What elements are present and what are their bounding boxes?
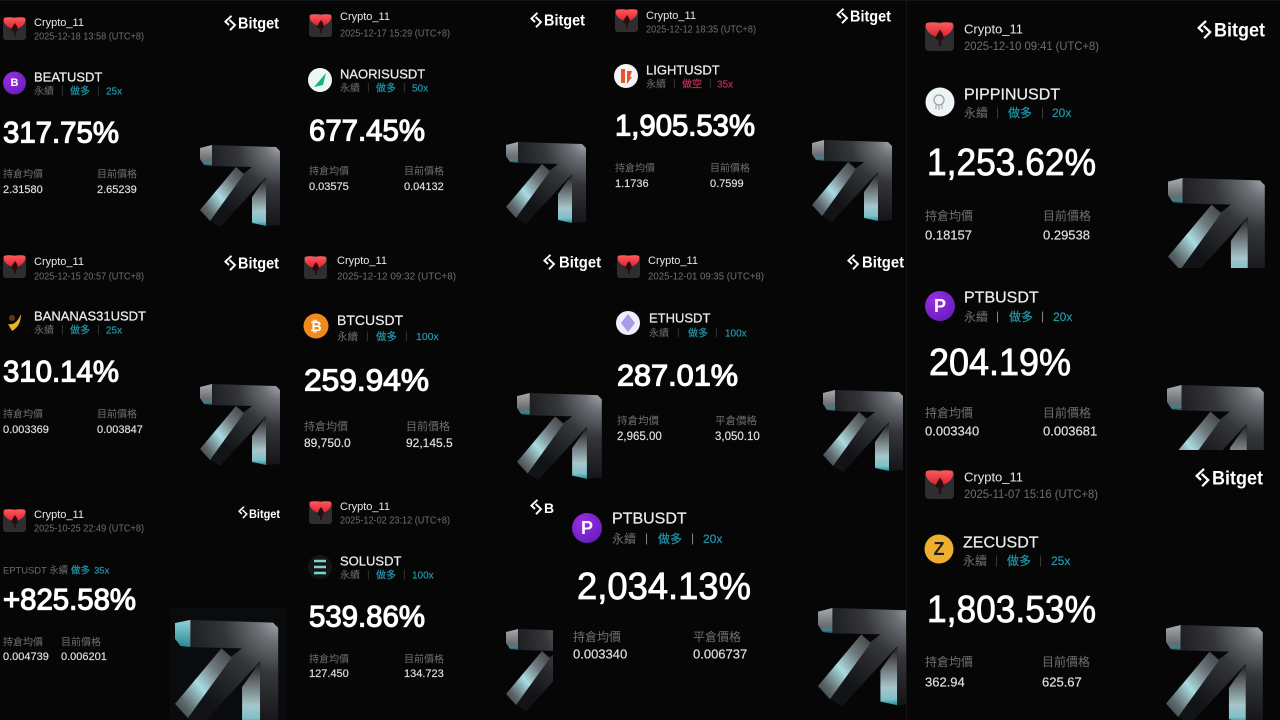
position details: | [709, 78, 712, 90]
arrow graphic [517, 393, 602, 480]
position details: 做多 [376, 568, 396, 582]
position details [3, 564, 110, 576]
username and timestamp [964, 470, 1098, 501]
avatar [3, 255, 26, 278]
panel: BANANAS31USDT card [3, 255, 280, 466]
position details: | [61, 86, 64, 96]
position details: | [996, 309, 999, 323]
avatar [3, 17, 26, 40]
entry price: 2,965.00 [617, 431, 662, 443]
current price [97, 168, 137, 196]
entry price [615, 162, 655, 190]
current price: 0.29538 [1043, 228, 1090, 242]
icon: LIGHT coin [614, 64, 638, 88]
position details: | [673, 78, 676, 90]
entry price [304, 419, 351, 450]
username and timestamp [648, 255, 764, 282]
Bitget logo, cropped: B [544, 500, 554, 516]
arrow graphic, cropped [506, 629, 553, 711]
position details: | [97, 324, 100, 336]
return percent: +825.58% [3, 584, 136, 616]
position details: | [405, 330, 408, 342]
panel: BEATUSDT card [3, 16, 280, 227]
icon: ZEC coin: Z [934, 539, 944, 559]
position details: 永續 [964, 309, 988, 324]
symbol: LIGHTUSDT [646, 62, 720, 78]
current price [404, 164, 444, 193]
entry price: 持倉均價 [573, 629, 621, 644]
username and timestamp: 2025-12-01 09:35 (UTC+8) [648, 272, 764, 282]
position details [963, 553, 1070, 568]
position details: | [367, 82, 370, 94]
Bitget logo: Bitget [238, 16, 280, 32]
position details [964, 105, 1071, 120]
panel: PTBUSDT card (right) [925, 291, 1264, 450]
current price: 0.006201 [61, 651, 107, 663]
position details: 做多 [658, 531, 682, 546]
entry price [3, 636, 49, 663]
current price: 目前價格 [404, 164, 444, 178]
position details: | [403, 82, 406, 94]
symbol: BANANAS31USDT [34, 308, 146, 324]
username and timestamp: 2025-12-15 20:57 (UTC+8) [34, 272, 144, 282]
position details: EPTUSDT 永續 [3, 564, 68, 576]
panel: SOLUSDT card [308, 499, 554, 711]
username and timestamp: 2025-10-25 22:49 (UTC+8) [34, 524, 144, 534]
username and timestamp: 2025-12-12 18:35 (UTC+8) [646, 24, 756, 36]
current price: 0.04132 [404, 181, 444, 193]
close price: 3,050.10 [715, 431, 760, 443]
icon: ETH coin [616, 311, 640, 335]
avatar [615, 9, 638, 32]
position details [34, 324, 122, 336]
entry price [925, 405, 979, 438]
arrow graphic [175, 620, 278, 720]
position details: | [1041, 105, 1044, 119]
current price: 目前價格 [1043, 405, 1091, 420]
username and timestamp [337, 255, 456, 282]
username and timestamp [964, 22, 1099, 53]
username and timestamp: Crypto_11 [34, 256, 84, 268]
username and timestamp: 2025-12-18 13:58 (UTC+8) [34, 32, 144, 42]
entry price: 持倉均價 [304, 419, 348, 433]
position details [612, 531, 722, 546]
entry price: 0.004739 [3, 651, 49, 663]
panel: ETHUSDT card [616, 254, 905, 472]
position details: 35x [94, 566, 110, 576]
close price: 平倉價格 [693, 629, 741, 644]
username and timestamp: 2025-12-17 15:29 (UTC+8) [340, 28, 450, 40]
return percent: 677.45% [309, 114, 425, 148]
panel: PTBUSDT card (center) [572, 510, 914, 706]
arrow graphic [506, 142, 586, 224]
arrow graphic [1167, 385, 1264, 450]
panel: NAORISUSDT card [308, 11, 586, 224]
Bitget logo: Bitget [544, 12, 586, 30]
username and timestamp: 2025-11-07 15:16 (UTC+8) [964, 487, 1098, 501]
entry price: 持倉均價 [3, 636, 43, 648]
position details: 永續 [337, 330, 358, 343]
arrow graphic [1168, 178, 1265, 277]
panel: PIPPINUSDT card [925, 20, 1266, 277]
icon: PTB coin: P [934, 296, 946, 316]
avatar [617, 255, 640, 278]
return percent: 310.14% [3, 356, 119, 388]
entry price: 持倉均價 [3, 168, 43, 180]
return percent: 2,034.13% [577, 566, 751, 608]
entry price: 127.450 [309, 668, 349, 680]
entry price: 持倉均價 [309, 164, 349, 178]
current price: 目前價格 [710, 162, 750, 174]
symbol: SOLUSDT [340, 554, 401, 568]
current price: 目前價格 [1043, 208, 1091, 223]
icon: NAORIS coin [308, 68, 332, 92]
icon: PTB coin [572, 513, 602, 543]
close price [693, 629, 747, 662]
arrow graphic [200, 145, 280, 227]
symbol: ETHUSDT [649, 310, 710, 326]
panel: ZECUSDT card [924, 468, 1264, 720]
current price: 目前價格 [97, 168, 137, 180]
username and timestamp [340, 501, 450, 526]
position details: 做空 [682, 78, 702, 90]
username and timestamp: Crypto_11 [646, 10, 696, 22]
symbol: ZECUSDT [963, 534, 1039, 552]
entry price: 持倉均價 [3, 408, 43, 420]
position details: | [645, 531, 648, 545]
entry price: 0.03575 [309, 181, 349, 193]
username and timestamp [34, 509, 144, 534]
position details: 做多 [1008, 105, 1032, 120]
return percent: 1,905.53% [615, 110, 755, 142]
avatar [925, 22, 954, 51]
position details [646, 78, 733, 90]
symbol: PTBUSDT [964, 290, 1039, 306]
position details: 永續 [646, 78, 666, 90]
entry price [925, 654, 973, 690]
symbol: NAORISUSDT [340, 66, 425, 82]
arrow graphic [812, 140, 892, 222]
position details: | [1041, 309, 1044, 323]
position details: 永續 [340, 82, 360, 94]
position details: | [715, 328, 718, 338]
current price: 0.7599 [710, 178, 744, 190]
username and timestamp: Crypto_11 [340, 11, 390, 23]
username and timestamp [646, 10, 756, 36]
username and timestamp: Crypto_11 [34, 17, 84, 29]
entry price: 持倉均價 [925, 208, 973, 223]
username and timestamp: Crypto_11 [964, 22, 1023, 36]
arrow graphic [818, 608, 914, 706]
return percent: 1,253.62% [927, 142, 1096, 184]
position details: 100x [412, 570, 434, 582]
Bitget logo: Bitget [559, 254, 602, 272]
position details: 永續 [964, 105, 988, 120]
position details: 做多 [70, 324, 90, 336]
entry price: 持倉均價 [617, 414, 659, 427]
entry price [3, 408, 49, 436]
current price: 目前價格 [61, 636, 101, 648]
avatar [309, 14, 332, 37]
Bitget logo: Bitget [1212, 468, 1264, 490]
position details: 25x [106, 326, 122, 336]
icon: BEAT coin: B [11, 77, 19, 89]
position details: 永續 [649, 326, 669, 340]
entry price: 2.31580 [3, 184, 43, 196]
username and timestamp: Crypto_11 [340, 501, 390, 513]
icon: BEAT coin [3, 72, 26, 94]
username and timestamp: 2025-12-10 09:41 (UTC+8) [964, 39, 1099, 53]
position details [340, 82, 428, 94]
Bitget logo: Bitget [850, 8, 892, 26]
current price [97, 408, 143, 436]
position details: 35x [717, 80, 733, 90]
current price [406, 419, 453, 450]
username and timestamp: Crypto_11 [34, 509, 84, 521]
current price: 2.65239 [97, 184, 137, 196]
position details: | [403, 570, 406, 580]
username and timestamp [340, 11, 450, 40]
position details: 做多 [70, 84, 90, 98]
icon: BTC coin: ₿ [310, 318, 322, 334]
entry price [3, 168, 43, 196]
current price: 目前價格 [1042, 654, 1090, 669]
position details: 永續 [612, 531, 636, 546]
entry price: 持倉均價 [615, 162, 655, 174]
current price: 目前價格 [97, 408, 137, 420]
position details: 做多 [71, 564, 90, 576]
arrow graphic [1166, 625, 1263, 720]
panel: BTCUSDT card [304, 254, 602, 480]
icon: PTB coin: P [581, 518, 593, 538]
current price: 0.003847 [97, 424, 143, 436]
return percent: 204.19% [929, 342, 1071, 384]
position details [340, 568, 434, 582]
return percent: 539.86% [309, 600, 425, 634]
symbol: PIPPINUSDT [964, 86, 1060, 104]
entry price [309, 164, 349, 193]
position details: 20x [1053, 310, 1072, 324]
entry price: 0.18157 [925, 228, 972, 242]
position details: 做多 [688, 326, 708, 340]
symbol: BEATUSDT [34, 70, 102, 84]
return percent: 287.01% [617, 360, 738, 392]
username and timestamp: Crypto_11 [337, 255, 387, 267]
entry price: 362.94 [925, 674, 965, 690]
Bitget logo: Bitget [862, 254, 905, 272]
current price: 625.67 [1042, 674, 1082, 690]
current price [1043, 208, 1091, 242]
position details: | [677, 328, 680, 338]
icon: SOL coin [308, 555, 332, 579]
entry price: 0.003340 [573, 646, 627, 662]
position details: 做多 [1007, 553, 1031, 568]
icon: PIPPIN coin [926, 88, 954, 116]
close price: 平倉價格 [715, 414, 757, 427]
position details [649, 326, 747, 340]
entry price: 0.003340 [925, 424, 979, 438]
position details: | [97, 86, 100, 96]
close price: 0.006737 [693, 646, 747, 662]
username and timestamp [34, 256, 144, 282]
return percent: 259.94% [304, 362, 429, 398]
username and timestamp: Crypto_11 [648, 255, 698, 267]
position details [337, 330, 440, 343]
current price [1042, 654, 1090, 690]
icon: PTB coin [925, 291, 955, 321]
return percent: 317.75% [3, 116, 119, 150]
panel: LIGHTUSDT card [614, 8, 892, 222]
position details: | [996, 105, 999, 119]
symbol: BTCUSDT [337, 312, 404, 328]
Bitget logo, cropped [531, 500, 554, 516]
return percent: 1,803.53% [927, 589, 1096, 631]
position details: | [995, 553, 998, 567]
current price: 134.723 [404, 668, 444, 680]
current price [61, 636, 107, 663]
symbol: PTBUSDT [612, 510, 687, 528]
entry price [925, 208, 973, 242]
entry price: 1.1736 [615, 178, 649, 190]
entry price [309, 652, 349, 680]
Bitget logo: Bitget [1214, 20, 1266, 42]
arrow graphic [200, 384, 280, 466]
close price [715, 414, 760, 443]
current price: 目前價格 [404, 652, 444, 666]
username and timestamp: 2025-12-12 09:32 (UTC+8) [337, 272, 456, 282]
entry price: 持倉均價 [309, 652, 349, 666]
current price: 92,145.5 [406, 436, 453, 450]
position details: 25x [1051, 554, 1070, 568]
position details: | [366, 330, 369, 342]
entry price: 89,750.0 [304, 436, 351, 450]
position details: 做多 [376, 330, 397, 343]
position details: 永續 [340, 568, 360, 582]
Bitget logo [239, 507, 280, 521]
position details: 100x [725, 328, 747, 340]
position details: | [61, 324, 64, 336]
icon: BANANAS coin [8, 314, 21, 331]
avatar [304, 256, 327, 279]
avatar [309, 501, 332, 524]
current price: 目前價格 [406, 419, 450, 433]
position details: 做多 [376, 82, 396, 94]
panel: EPTUSDT card [3, 507, 286, 720]
position details: 永續 [34, 324, 54, 336]
entry price: 0.003369 [3, 424, 49, 436]
current price [1043, 405, 1097, 438]
position details: 20x [1052, 106, 1071, 120]
position details: 20x [703, 532, 722, 546]
username and timestamp: 2025-12-02 23:12 (UTC+8) [340, 516, 450, 526]
username and timestamp [34, 17, 144, 42]
username and timestamp: Crypto_11 [964, 470, 1023, 484]
current price [404, 652, 444, 680]
avatar [925, 470, 954, 499]
arrow graphic [823, 390, 903, 472]
avatar [3, 509, 26, 532]
position details: 永續 [34, 84, 54, 98]
position details: | [1039, 553, 1042, 567]
entry price: 持倉均價 [925, 654, 973, 669]
position details: 做多 [1009, 309, 1033, 324]
position details: 100x [416, 331, 440, 343]
icon: ZEC coin [924, 534, 954, 564]
current price [710, 162, 750, 190]
current price: 0.003681 [1043, 424, 1097, 438]
entry price [573, 629, 627, 662]
position details: 25x [106, 86, 122, 98]
position details [964, 309, 1072, 324]
position details: | [367, 570, 370, 580]
position details: 永續 [963, 553, 987, 568]
position details: 50x [412, 84, 428, 94]
position details [34, 84, 122, 98]
entry price [617, 414, 662, 443]
icon: BTC coin [304, 314, 328, 338]
Bitget logo: Bitget [249, 507, 280, 521]
Bitget logo: Bitget [238, 256, 280, 272]
entry price: 持倉均價 [925, 405, 973, 420]
position details: | [691, 531, 694, 545]
